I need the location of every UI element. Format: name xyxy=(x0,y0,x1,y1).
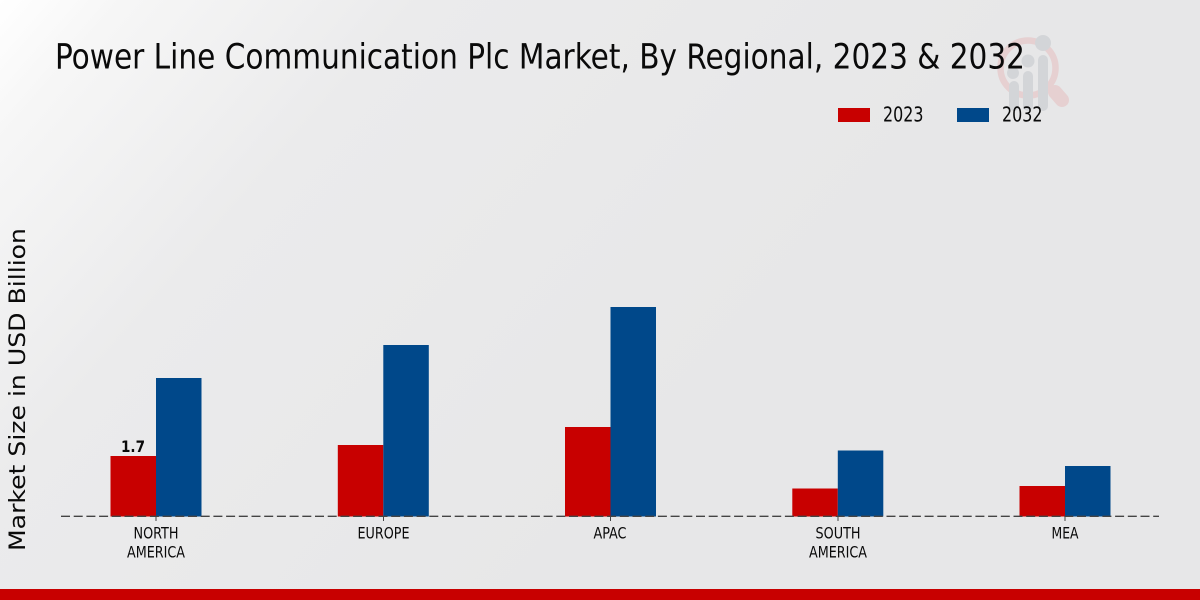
x-axis labels: AMERICA xyxy=(809,542,867,562)
label: North America: NORTH xyxy=(134,524,178,542)
bars: South America xyxy=(792,450,883,516)
x-axis baseline and ticks xyxy=(61,516,1159,521)
legend item: 2032: 2032 xyxy=(1002,102,1042,126)
icon: watermark logo xyxy=(1000,35,1062,111)
label: APAC: APAC xyxy=(594,524,626,542)
legend item: 2023 xyxy=(838,102,924,126)
legend xyxy=(838,102,1042,126)
legend item: 2032 xyxy=(957,102,1042,126)
data label: 1.7: 1.7 xyxy=(121,437,145,456)
legend item: 2023: 2023 xyxy=(883,102,924,126)
title: Power Line Communication Plc Market, By Regional, 2023 & 2032 xyxy=(55,38,1025,78)
footer bar xyxy=(0,589,1200,600)
label: Europe: EUROPE xyxy=(358,524,410,542)
bars: Europe xyxy=(338,345,429,516)
y-axis label: Market Size in USD Billion xyxy=(5,228,31,551)
label: MEA: MEA xyxy=(1052,524,1079,542)
x-axis labels: AMERICA xyxy=(127,542,185,562)
label: South America: SOUTH xyxy=(816,524,860,542)
bars: APAC xyxy=(565,307,656,516)
bar chart xyxy=(61,307,1159,521)
bars: MEA xyxy=(1020,466,1110,516)
bars: North America xyxy=(110,378,202,516)
x-axis labels xyxy=(127,524,1079,562)
